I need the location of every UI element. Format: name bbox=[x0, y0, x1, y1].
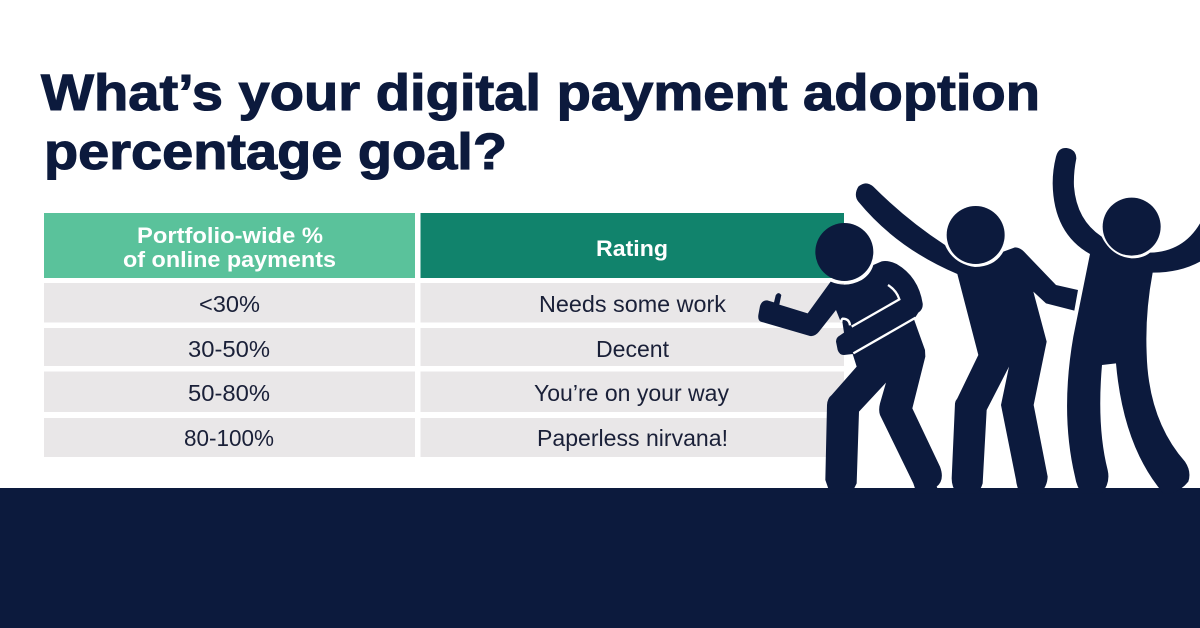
figure: thumbs-up person bbox=[758, 223, 942, 493]
table row: 30 to 50 percent bbox=[44, 328, 844, 366]
table row: 50 to 80 percent: 50-80% bbox=[188, 380, 270, 406]
figure: person waving, centre bbox=[856, 183, 1078, 493]
table header: portfolio-wide percentage: of online payments bbox=[123, 247, 336, 272]
table bbox=[44, 213, 844, 457]
title bbox=[41, 64, 1040, 180]
table row: 80 to 100 percent: Paperless nirvana! bbox=[537, 425, 728, 451]
table row: 30 to 50 percent: 30-50% bbox=[188, 336, 270, 362]
footer band bbox=[0, 488, 1200, 628]
table row: under 30 percent bbox=[44, 283, 844, 322]
illustration: three celebrating figures bbox=[758, 148, 1200, 493]
table row: 80 to 100 percent: 80-100% bbox=[184, 425, 274, 451]
table header: portfolio-wide percentage bbox=[44, 213, 415, 278]
table header: portfolio-wide percentage: Portfolio-wide % bbox=[137, 223, 323, 248]
table row: under 30 percent: Needs some work bbox=[539, 291, 726, 317]
figure: person with raised arms, right bbox=[1053, 148, 1200, 493]
thumbs-up arm outline bbox=[841, 285, 916, 353]
title: percentage goal? bbox=[44, 123, 507, 180]
title: What’s your digital payment adoption bbox=[41, 64, 1040, 121]
table header: rating bbox=[420, 213, 844, 278]
table row: 50 to 80 percent bbox=[44, 372, 844, 412]
table row: 30 to 50 percent: Decent bbox=[596, 336, 670, 362]
table row: 80 to 100 percent bbox=[44, 418, 844, 457]
table header: rating: Rating bbox=[596, 236, 668, 261]
table row: under 30 percent: <30% bbox=[199, 291, 260, 317]
table row: 50 to 80 percent: You’re on your way bbox=[534, 380, 729, 406]
